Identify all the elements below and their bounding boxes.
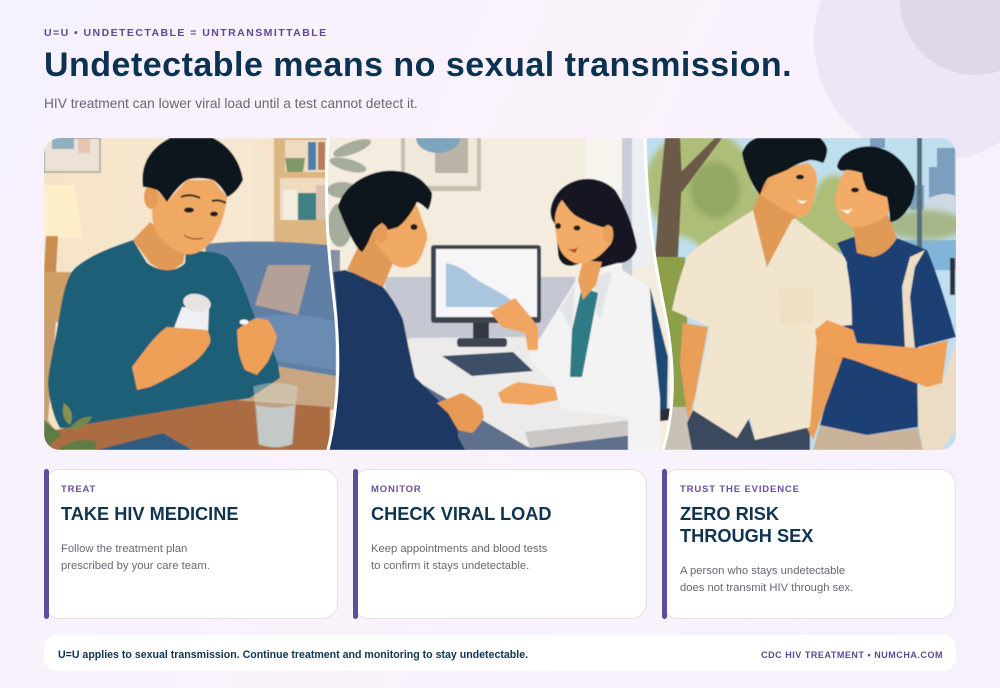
card 2 heading: CHECK VIRAL LOAD: [371, 504, 552, 524]
subtitle: HIV treatment can lower viral load until a test cannot detect it.: [44, 96, 418, 111]
card 3 body: A person who stays undetectable: [680, 565, 845, 577]
man in cream shirt: [672, 138, 852, 450]
table: [44, 400, 330, 450]
tree foliage: [648, 138, 956, 258]
card 3 heading: ZERO RISK: [680, 504, 779, 524]
panel: couple in the park: [640, 130, 965, 450]
partner arm: [815, 320, 948, 387]
water: [902, 240, 956, 270]
title: Undetectable means no sexual transmission.: [44, 46, 792, 84]
floor: [237, 366, 336, 410]
partner in navy tee: [813, 146, 956, 450]
card 1 body: [61, 543, 210, 572]
footer note: U=U applies to sexual transmission. Continue treatment and monitoring to stay undetectable.: [58, 649, 528, 661]
card: monitor: [353, 469, 647, 619]
card 1 body: Follow the treatment plan: [61, 543, 187, 555]
keyboard: [442, 352, 533, 376]
eyebrow: U=U • UNDETECTABLE = UNTRANSMITTABLE: [44, 27, 328, 39]
hands: [132, 318, 277, 390]
hair: [142, 138, 243, 202]
card 3 heading: THROUGH SEX: [680, 526, 813, 546]
plant: [44, 403, 97, 450]
card 2 body: to confirm it stays undetectable.: [371, 560, 529, 572]
chair: [650, 287, 668, 410]
card 1 body: prescribed by your care team.: [61, 560, 210, 572]
wall picture: [44, 138, 100, 172]
card 1 label: TREAT: [61, 484, 96, 495]
panel: taking medicine at home: [44, 138, 336, 450]
icon: glass of water: [254, 384, 297, 447]
card: treat: [44, 469, 338, 619]
patient: [328, 171, 484, 450]
card 2 body: [371, 543, 547, 572]
desk: [410, 337, 632, 450]
person with sweater: [48, 138, 280, 430]
bookshelf: [274, 138, 328, 246]
source credit: CDC HIV TREATMENT • NUMCHA.COM: [761, 650, 943, 660]
card 3 label: TRUST THE EVIDENCE: [680, 484, 800, 495]
bush: [656, 256, 688, 408]
lamp post: [917, 138, 922, 248]
footer bar: [44, 635, 956, 671]
tote bag: [916, 344, 956, 450]
card 3 body: [680, 565, 853, 594]
plant: [327, 136, 373, 247]
dividers: [326, 138, 338, 450]
monitor with falling viral load chart: [431, 245, 541, 347]
armchair back: [44, 321, 56, 427]
sofa: [205, 241, 336, 376]
doctor: [490, 179, 660, 450]
card 2 body: Keep appointments and blood tests: [371, 543, 547, 555]
ground: [664, 406, 694, 450]
card 3 heading: [680, 504, 814, 546]
card 3 body: does not transmit HIV through sex.: [680, 582, 853, 594]
wall art: [400, 138, 482, 192]
city skyline: [870, 138, 955, 215]
decorative circles: [814, 0, 1000, 159]
lamp: [44, 185, 83, 272]
card: trust the evidence: [662, 469, 956, 619]
card 1 heading: TAKE HIV MEDICINE: [61, 504, 239, 524]
card 2 label: MONITOR: [371, 484, 422, 495]
fence: [950, 258, 955, 295]
icon: pill bottle: [174, 292, 212, 332]
illustration strip: [44, 138, 956, 450]
panel: care team visit: [320, 123, 670, 450]
